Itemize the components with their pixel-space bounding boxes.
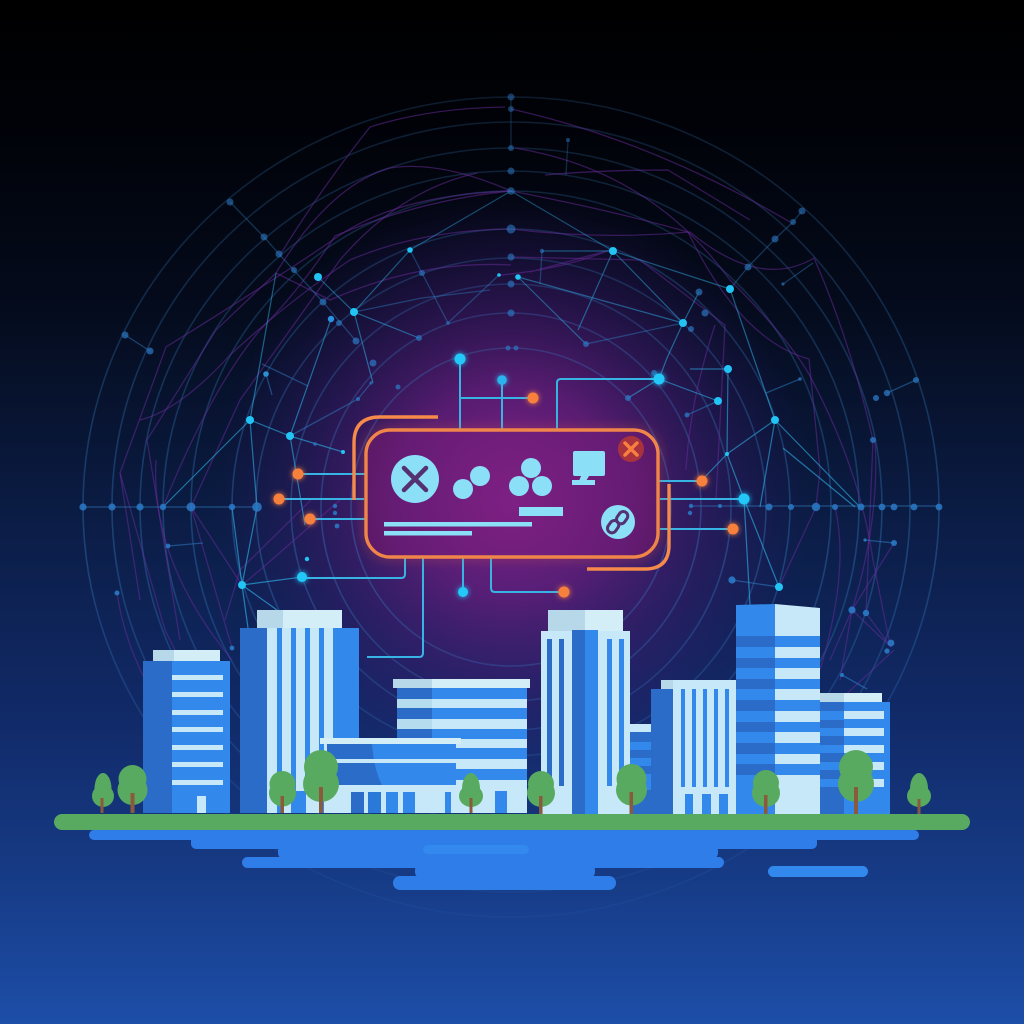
building: centre tower xyxy=(541,610,630,814)
building: low centre block xyxy=(320,738,461,813)
building: tall columned tower xyxy=(240,610,359,813)
icon: chain link xyxy=(601,505,635,539)
outer bracket top left xyxy=(354,417,438,500)
building: right tower xyxy=(820,693,890,814)
water highlight xyxy=(423,845,529,854)
tree 10 xyxy=(907,773,931,814)
icon: two circles xyxy=(453,466,490,499)
building: striped rear centre xyxy=(393,679,530,813)
central panel xyxy=(354,417,669,569)
panel body xyxy=(366,430,658,557)
orange connector nodes xyxy=(274,392,738,598)
purple arcs xyxy=(117,107,894,760)
tree 8 xyxy=(752,770,780,814)
dim nodes xyxy=(79,94,942,677)
tree 9 xyxy=(838,750,874,814)
tree 4 xyxy=(303,750,339,813)
tree 1 xyxy=(92,773,114,813)
purple glow xyxy=(180,170,844,834)
building: tallest striped tower xyxy=(736,604,820,814)
building: rear striped stub xyxy=(630,724,651,814)
trees xyxy=(92,750,931,814)
cyan connector nodes xyxy=(297,354,750,597)
text bar: short xyxy=(519,507,563,516)
icon: red close badge xyxy=(618,436,644,462)
tree 5 xyxy=(459,773,483,813)
city skyline xyxy=(143,604,890,814)
tree 6 xyxy=(527,771,555,814)
tree 2 xyxy=(118,765,148,813)
concentric rings xyxy=(83,97,939,917)
tree 3 xyxy=(269,771,296,813)
building: left tower xyxy=(143,650,230,813)
panel glow xyxy=(366,430,658,557)
bright nodes xyxy=(238,247,783,591)
water puddle xyxy=(768,866,868,877)
icon: three circles xyxy=(509,458,552,496)
water xyxy=(89,830,919,890)
tree 7 xyxy=(616,764,647,814)
text bar: long xyxy=(384,522,532,526)
panel connectors xyxy=(274,354,750,657)
outer bracket bottom right xyxy=(587,484,669,569)
dim connection lines xyxy=(83,97,939,689)
connector lines xyxy=(279,359,744,657)
building: slat tower xyxy=(651,680,736,814)
icon: monitor xyxy=(572,451,605,485)
text bar: medium xyxy=(384,531,472,536)
green ground strip xyxy=(54,814,970,830)
bright connection lines xyxy=(163,191,860,628)
network globe xyxy=(79,94,942,917)
icon: X circle xyxy=(391,455,439,503)
